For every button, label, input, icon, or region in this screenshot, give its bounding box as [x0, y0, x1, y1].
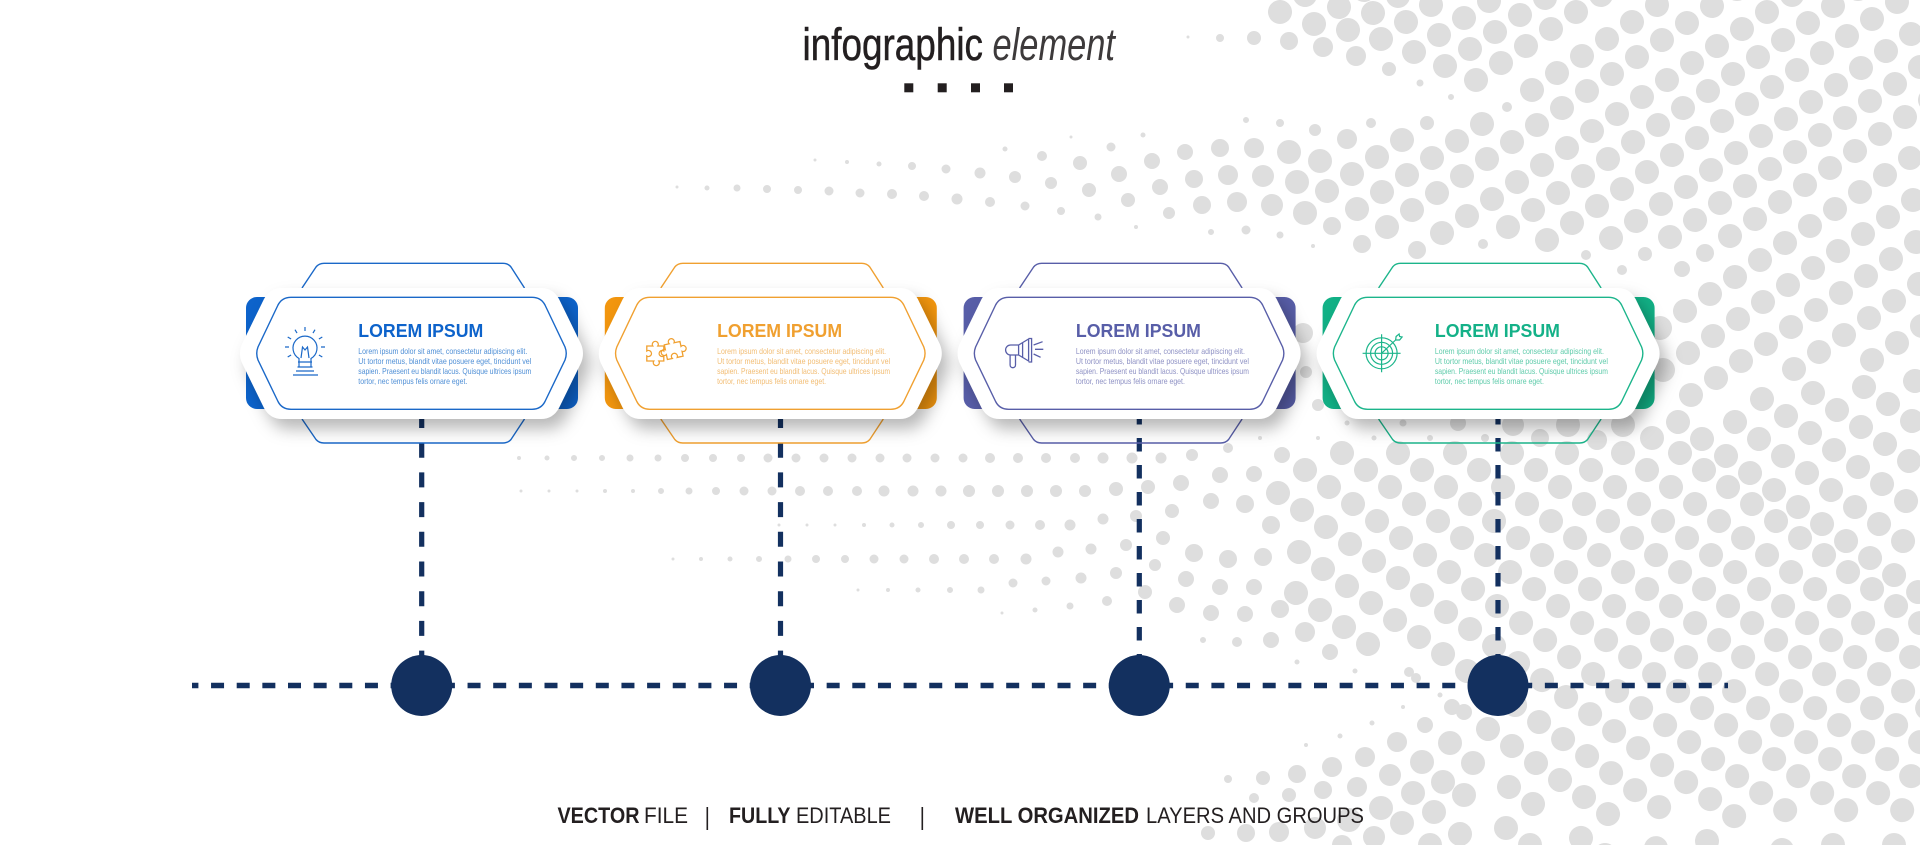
timeline node 1: [391, 655, 452, 716]
body text: sapien. Praesent eu blandit lacus. Quisque ultrices ipsum: [1435, 366, 1608, 376]
timeline node 3: [1109, 655, 1170, 716]
inner outline: [257, 297, 566, 409]
body text: [717, 346, 890, 386]
panel: step 1 blue: [240, 263, 583, 443]
back outline: [661, 263, 883, 443]
white plate: [1317, 288, 1660, 419]
body text: Lorem ipsum dolor sit amet, consectetur adipiscing elit.: [1076, 346, 1245, 356]
inner outline: [616, 297, 925, 409]
heading: LOREM IPSUM: [1435, 320, 1560, 341]
body text: sapien. Praesent eu blandit lacus. Quisque ultrices ipsum: [717, 366, 890, 376]
footer caption: [558, 803, 1364, 830]
body text: tortor, nec tempus felis ornare eget.: [1435, 376, 1544, 386]
body text: Ut tortor metus, blandit vitae posuere eget, tincidunt vel: [1076, 356, 1249, 366]
body text: Lorem ipsum dolor sit amet, consectetur adipiscing elit.: [1435, 346, 1604, 356]
panel: step 2 orange: [599, 263, 942, 443]
connector 1: [419, 413, 424, 656]
footer caption: WELL ORGANIZED: [955, 803, 1139, 828]
back outline: [1379, 263, 1601, 443]
icon: puzzle: [647, 336, 688, 366]
timeline dashed axis: [192, 683, 1728, 688]
body text: Lorem ipsum dolor sit amet, consectetur adipiscing elit.: [717, 346, 886, 356]
body text: tortor, nec tempus felis ornare eget.: [1076, 376, 1185, 386]
body text: sapien. Praesent eu blandit lacus. Quisque ultrices ipsum: [1076, 366, 1249, 376]
white plate: [240, 288, 583, 419]
timeline node 2: [750, 655, 811, 716]
footer caption: EDITABLE: [796, 803, 891, 828]
body text: Ut tortor metus, blandit vitae posuere eget, tincidunt vel: [1435, 356, 1608, 366]
body text: Ut tortor metus, blandit vitae posuere eget, tincidunt vel: [358, 356, 531, 366]
white plate: [958, 288, 1301, 419]
body text: Ut tortor metus, blandit vitae posuere eget, tincidunt vel: [717, 356, 890, 366]
panel: step 4 green: [1317, 263, 1660, 443]
title: infographic: [802, 19, 983, 70]
body text: tortor, nec tempus felis ornare eget.: [358, 376, 467, 386]
title dots: [904, 83, 1013, 92]
connector 3: [1137, 411, 1142, 656]
body text: [1435, 346, 1608, 386]
side tabs: [246, 297, 578, 409]
heading: LOREM IPSUM: [1076, 320, 1201, 341]
inner outline: [1333, 297, 1643, 409]
heading: LOREM IPSUM: [358, 320, 483, 341]
footer caption: FILE: [644, 803, 688, 828]
body text: [1076, 346, 1249, 386]
footer caption: VECTOR: [558, 803, 640, 828]
connector 4: [1495, 411, 1501, 656]
icon: target: [1363, 334, 1402, 372]
white plate: [599, 288, 942, 419]
body text: [358, 346, 531, 386]
icon: megaphone: [1006, 338, 1043, 368]
body text: Lorem ipsum dolor sit amet, consectetur adipiscing elit.: [358, 346, 527, 356]
body text: sapien. Praesent eu blandit lacus. Quisque ultrices ipsum: [358, 366, 531, 376]
footer caption: LAYERS AND GROUPS: [1146, 803, 1364, 828]
icon: light bulb: [285, 327, 325, 375]
side tabs: [964, 297, 1296, 409]
body text: tortor, nec tempus felis ornare eget.: [717, 376, 826, 386]
footer caption: FULLY: [729, 803, 791, 828]
back outline: [1020, 263, 1242, 443]
timeline node 4: [1468, 655, 1528, 716]
side tabs: [1323, 297, 1655, 409]
panel: step 3 purple: [958, 263, 1301, 443]
title: element: [992, 19, 1117, 70]
heading: LOREM IPSUM: [717, 320, 842, 341]
inner outline: [974, 297, 1284, 409]
back outline: [302, 263, 524, 443]
side tabs: [605, 297, 937, 409]
connector 2: [778, 413, 783, 656]
